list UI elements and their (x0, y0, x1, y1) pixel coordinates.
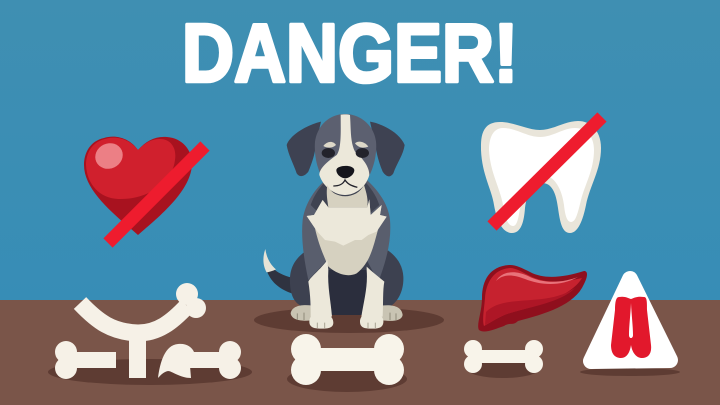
dog tail (263, 249, 295, 294)
bone: left pile, right bone with fragment (158, 341, 241, 379)
shadow under left bones (48, 359, 252, 385)
right bone shadow (467, 360, 539, 378)
dog chest (307, 199, 387, 275)
dog back paws (291, 305, 403, 321)
bone: left pile, left bone (55, 341, 116, 379)
dog (263, 114, 405, 329)
background: blue wall (0, 0, 720, 301)
icon: liver (478, 265, 587, 331)
dog shadow (254, 307, 444, 333)
dog ears (287, 122, 405, 176)
icon: crossed-out tooth (481, 117, 602, 233)
icon: warning triangle with red A shape (580, 279, 680, 376)
dog front legs (308, 260, 384, 329)
dog body (302, 178, 390, 282)
icon: crossed-out heart (84, 137, 205, 243)
bone: left pile, curved Y-shaped bone (80, 283, 206, 378)
dog head (315, 114, 376, 207)
center bone shadow (287, 366, 407, 392)
background: brown floor (0, 300, 720, 405)
bone: right (464, 340, 543, 373)
dog haunches (290, 243, 403, 308)
title: DANGER! (182, 6, 518, 100)
bone: center (291, 334, 404, 385)
